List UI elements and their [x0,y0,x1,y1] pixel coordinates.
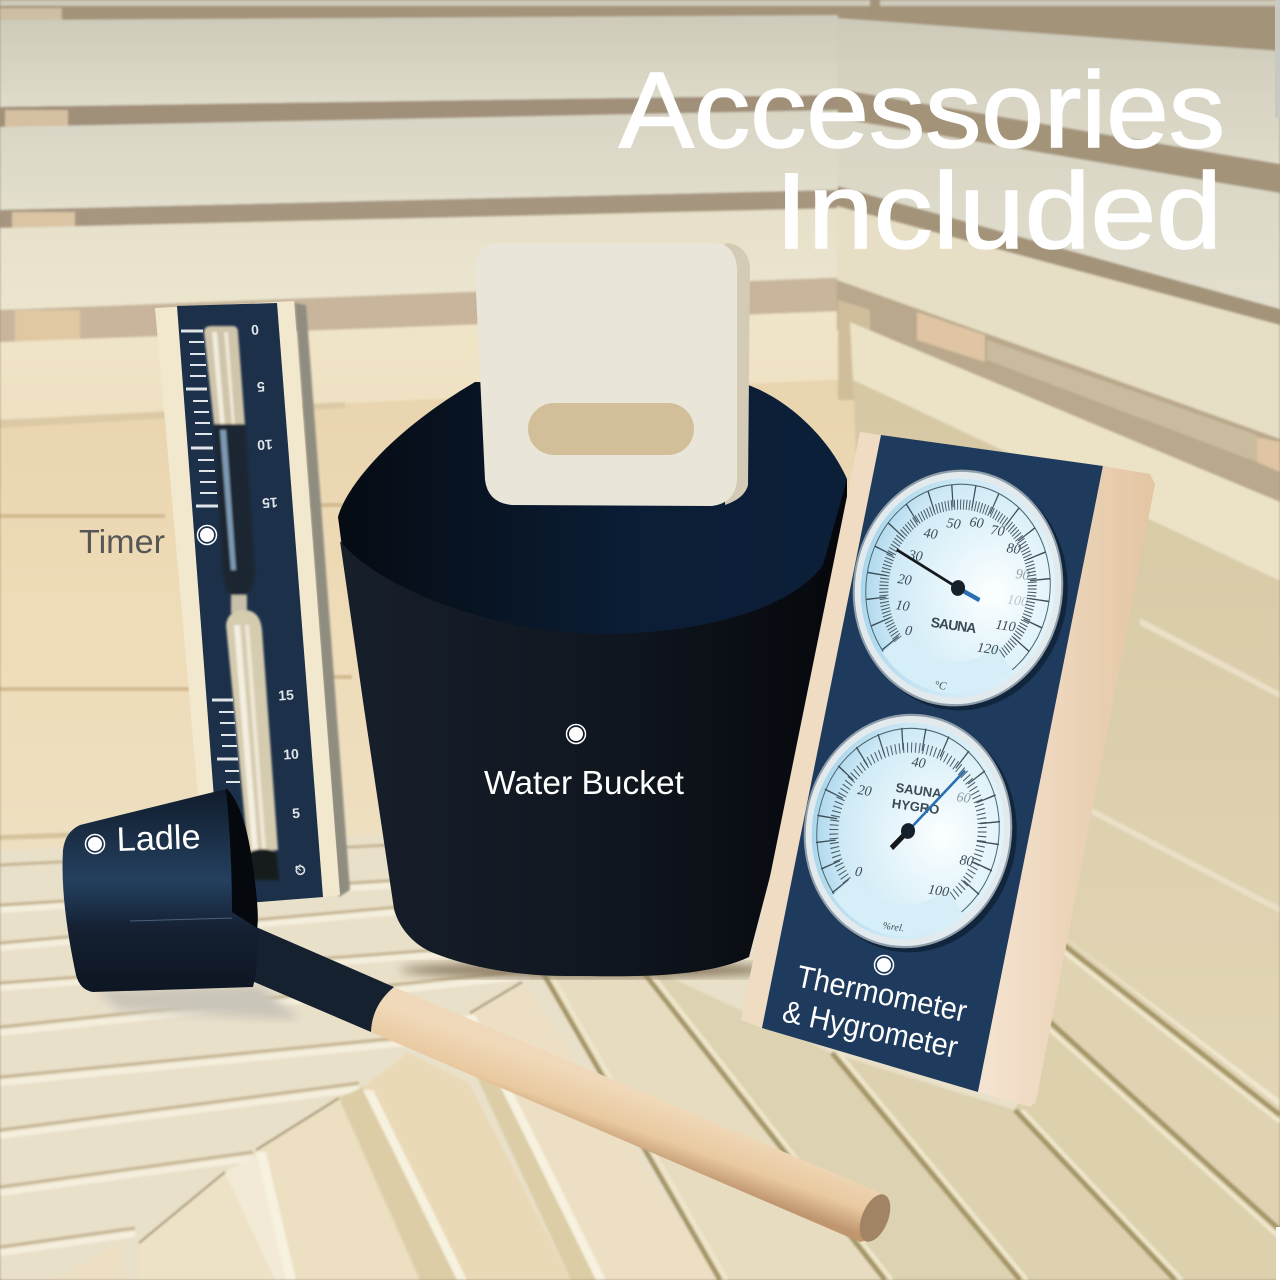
timer numbers: 0 [250,322,259,338]
timer numbers: 5 [292,805,301,821]
ladle [63,788,896,1246]
hygrometer numbers: 80 [959,853,974,870]
thermometer numbers: 10 [895,598,910,615]
thermometer numbers: 30 [907,548,923,565]
title [619,49,1225,271]
hygrometer needle [891,762,965,857]
thermometer numbers: 50 [946,516,961,533]
thermometer numbers: 40 [923,526,938,543]
title: Included [775,150,1222,271]
thermometer and hygrometer label: & Hygrometer [780,994,961,1065]
thermometer numbers: SAUNA [930,614,978,636]
hygrometer numbers: SAUNA [895,780,943,801]
thermometer needle [891,550,985,600]
thermometer numbers: 80 [1006,541,1021,558]
timer numbers: 15 [261,494,278,512]
water bucket label: Water Bucket [484,764,684,801]
thermometer numbers: 120 [976,641,999,658]
thermometer numbers: 70 [990,523,1005,540]
wooden paddle insert [475,243,750,506]
thermometer and hygrometer label [780,956,970,1065]
timer scale ticks [181,331,240,782]
hygrometer numbers: HYGRO [891,796,940,817]
thermometer numbers [895,515,1030,693]
timer navy panel [177,303,323,905]
thermometer and hygrometer label: Thermometer [794,959,970,1029]
thermometer and hygrometer board [741,432,1155,1107]
hygrometer numbers: %rel. [882,921,905,934]
ladle label: Ladle [116,818,201,859]
thermometer numbers: 20 [897,572,912,589]
hygrometer numbers [854,755,974,934]
timer label: Timer [79,523,165,560]
thermometer numbers: 0 [904,624,913,639]
hygrometer numbers: 40 [911,755,926,772]
timer numbers: 10 [256,436,273,454]
water bucket label [484,724,684,801]
thermometer numbers: 100 [1006,593,1029,610]
hygrometer numbers: 20 [857,783,872,800]
timer wood frame [155,301,340,908]
ladle wooden handle [371,987,896,1246]
timer numbers: 10 [283,745,300,763]
hygrometer numbers: 60 [956,790,971,807]
thermometer dial [838,457,1083,724]
timer label [79,523,216,560]
hygrometer dial [789,701,1032,966]
timer [155,301,350,908]
thermometer numbers: 90 [1015,567,1030,584]
ladle cup [63,788,258,992]
timer numbers: 5 [256,379,265,395]
board navy panel [762,435,1103,1092]
hygrometer numbers: 100 [927,883,950,900]
board left wood strip [741,432,881,1028]
thermometer numbers: 110 [995,618,1016,635]
upper glass with sand [204,326,279,880]
timer numbers [250,322,310,879]
water bucket [338,243,847,978]
bucket front body [340,479,847,976]
timer numbers: 15 [278,686,295,704]
ladle black handle [238,920,394,1032]
thermometer numbers: 60 [969,515,984,532]
hygrometer numbers: 0 [854,865,863,880]
timer numbers: ⏱ [290,861,310,879]
bucket interior back wall [338,382,847,660]
thermometer numbers: °C [934,679,948,693]
board right wood strip [978,466,1155,1107]
title: Accessories [619,49,1225,170]
